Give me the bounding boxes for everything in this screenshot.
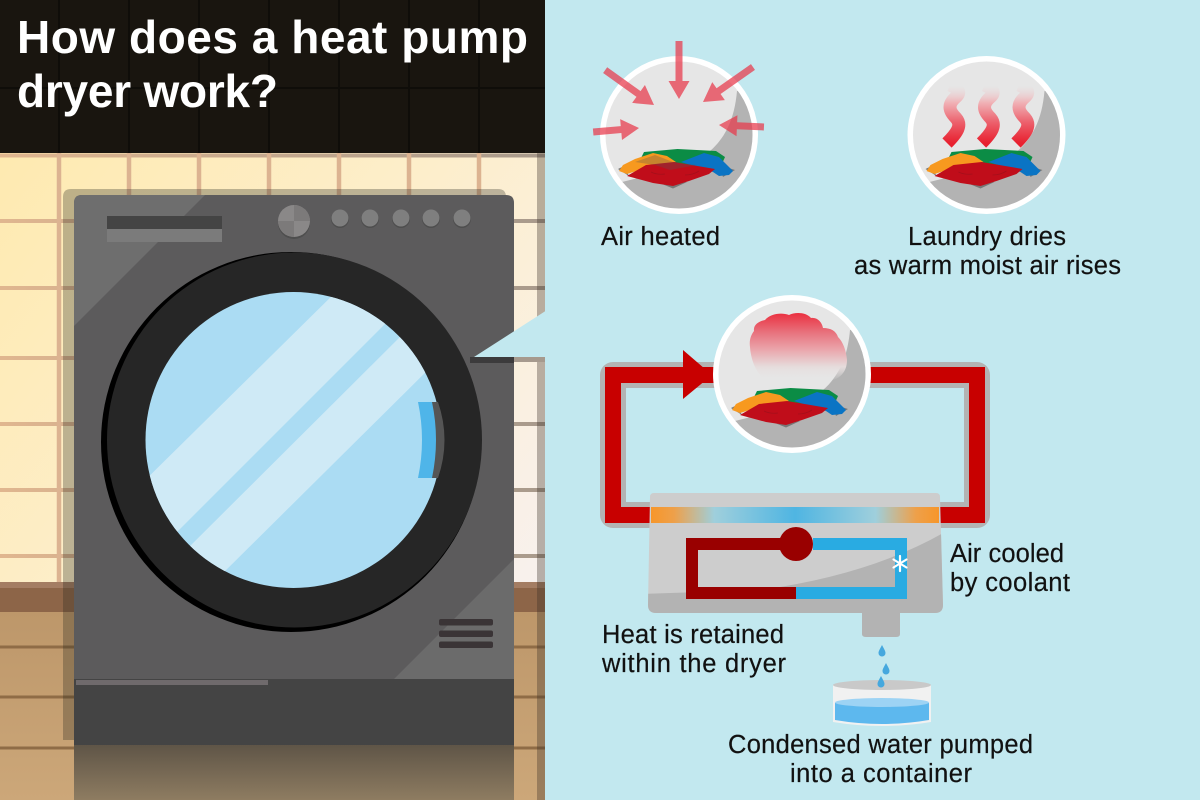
icon: snowflake xyxy=(894,556,906,571)
title band xyxy=(0,0,545,153)
dryer door xyxy=(101,252,482,632)
label: condensed water: Condensed water pumped xyxy=(728,731,1033,759)
step: laundry dries illustration xyxy=(908,56,1076,225)
drain nozzle xyxy=(862,613,900,637)
dryer label plate xyxy=(107,216,222,242)
label: laundry dries xyxy=(854,223,1121,280)
label: air heated: Air heated xyxy=(601,223,720,251)
heat retained loop xyxy=(692,527,813,593)
label: heat retained: Heat is retained xyxy=(602,621,784,649)
panel: right explanation background xyxy=(545,0,1200,800)
label: heat retained: within the dryer xyxy=(601,650,786,678)
control buttons xyxy=(331,210,471,228)
label: laundry dries: as warm moist air rises xyxy=(854,252,1121,280)
floor reflection xyxy=(74,745,514,800)
water container xyxy=(833,680,931,726)
step: moist warm air illustration xyxy=(713,295,882,464)
label: air cooled: by coolant xyxy=(950,569,1070,597)
label: air cooled: Air cooled xyxy=(950,540,1064,568)
vent slots xyxy=(439,619,493,648)
air circulation pipe xyxy=(613,350,977,515)
label: condensed water xyxy=(728,731,1033,788)
icon: water drops xyxy=(878,645,890,688)
control knob xyxy=(278,205,310,239)
label: condensed water: into a container xyxy=(790,760,972,788)
callout pointer xyxy=(470,311,546,363)
title band: How does a heat pump xyxy=(17,11,528,63)
label: air cooled xyxy=(950,540,1070,597)
title band: dryer work? xyxy=(17,65,278,117)
label: heat retained xyxy=(601,621,786,678)
panel: kitchen scene background xyxy=(0,153,545,800)
label: laundry dries: Laundry dries xyxy=(908,223,1066,251)
dryer machine xyxy=(63,189,514,800)
condenser unit xyxy=(640,493,950,637)
coolant loop xyxy=(796,544,901,593)
step: air heated illustration xyxy=(592,41,769,225)
